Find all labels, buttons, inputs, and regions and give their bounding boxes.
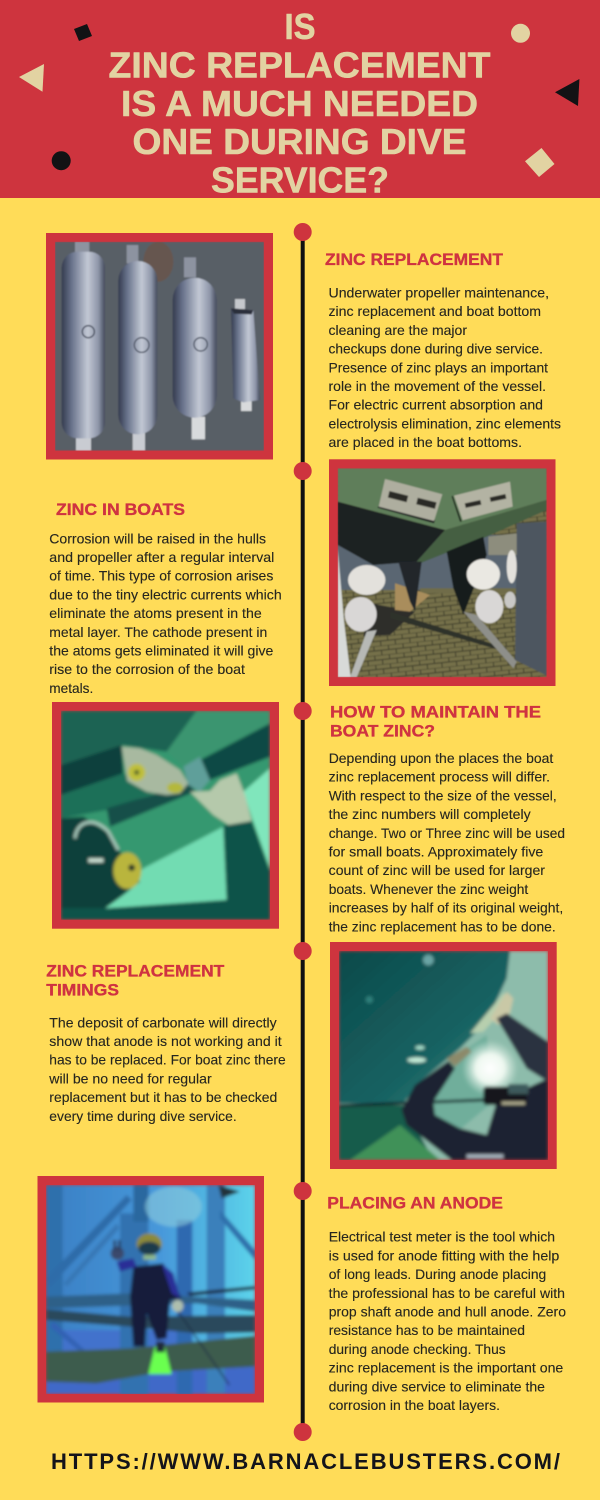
heading: zinc replacement timings: ZINC REPLACEMENT (46, 962, 225, 981)
text: placing an anode: corrosion in the boat layers. (329, 1397, 500, 1413)
text: zinc replacement: cleaning are the major (328, 322, 467, 338)
text: how to maintain the boat zinc: the zinc numbers will completely (329, 806, 531, 822)
header banner (0, 0, 600, 200)
photo: diver at offshore platform (38, 1176, 264, 1402)
text: zinc replacement: Underwater propeller maintenance, (328, 284, 549, 300)
text: placing an anode: prop shaft anode and hull anode. Zero (329, 1304, 566, 1320)
photo: zinc anodes (46, 233, 273, 460)
text: placing an anode: during anode checking. Thus (329, 1341, 506, 1357)
heading: zinc replacement: ZINC REPLACEMENT (325, 250, 504, 269)
text: zinc replacement: Presence of zinc plays an important (328, 359, 548, 375)
text: zinc replacement timings (48, 1014, 286, 1124)
icon: black square (74, 24, 92, 41)
text: zinc replacement timings: show that anode is not working and it (49, 1033, 282, 1049)
text: how to maintain the boat zinc (329, 750, 565, 934)
text: placing an anode: resistance has to be maintained (329, 1322, 525, 1338)
text: placing an anode: of long leads. During anode placing (329, 1266, 546, 1282)
text: how to maintain the boat zinc: the zinc replacement has to be done. (329, 918, 556, 934)
heading: how to maintain the boat zinc (330, 703, 541, 741)
text: placing an anode: zinc replacement is the important one (329, 1360, 564, 1376)
text: zinc replacement timings: replacement but it has to be checked (49, 1089, 277, 1105)
text: how to maintain the boat zinc: Depending upon the places the boat (329, 750, 553, 766)
text: how to maintain the boat zinc: increases by half of its original weight, (329, 900, 563, 916)
text: zinc replacement (328, 284, 561, 450)
text: placing an anode: during dive service to eliminate the (329, 1378, 545, 1394)
heading: how to maintain the boat zinc: HOW TO MAINTAIN THE (330, 703, 541, 722)
title: ZINC REPLACEMENT (108, 44, 491, 86)
photo: divers' hands underwater (52, 702, 279, 929)
text: how to maintain the boat zinc: count of zinc will be used for larger (329, 862, 545, 878)
text: zinc replacement timings: will be no need for regular (48, 1070, 212, 1086)
text: zinc replacement timings: The deposit of carbonate will directly (49, 1014, 277, 1030)
text: zinc in boats: metal layer. The cathode present in (49, 624, 267, 640)
text: zinc in boats: metals. (49, 680, 93, 696)
text: zinc in boats: rise to the corrosion of the boat (49, 661, 245, 677)
text: how to maintain the boat zinc: change. Two or Three zinc will be used (329, 825, 565, 841)
icon: black triangle (555, 79, 579, 106)
heading: zinc replacement timings: TIMINGS (46, 981, 119, 1000)
heading: placing an anode: PLACING AN ANODE (327, 1193, 503, 1212)
text: zinc replacement: role in the movement of the vessel. (328, 378, 546, 394)
heading: zinc in boats: ZINC IN BOATS (56, 500, 185, 519)
text: zinc replacement timings: has to be replaced. For boat zinc there (49, 1052, 286, 1068)
text: zinc in boats: and propeller after a regular interval (49, 549, 274, 565)
text: how to maintain the boat zinc: for small boats. Approximately five (329, 844, 544, 860)
photo: diver under hull (330, 942, 557, 1169)
text: zinc in boats: the atoms gets eliminated it will give (49, 642, 274, 658)
text: placing an anode: Electrical test meter is the tool which (329, 1229, 555, 1245)
timeline (294, 223, 312, 1441)
title: SERVICE? (211, 160, 389, 200)
title: IS A MUCH NEEDED (121, 83, 478, 124)
photo: boat hull with zinc plates (329, 459, 556, 686)
heading: zinc replacement timings (46, 962, 225, 1000)
text: placing an anode (329, 1229, 566, 1413)
title: ONE DURING DIVE (132, 121, 466, 162)
text: zinc in boats: eliminate the atoms present in the (49, 605, 262, 621)
title (108, 6, 491, 200)
icon: black circle (52, 151, 71, 170)
text: how to maintain the boat zinc: boats. Whenever the zinc weight (329, 881, 528, 897)
text: zinc replacement: are placed in the boat bottoms. (328, 434, 522, 450)
text: zinc in boats: due to the tiny electric currents which (49, 586, 282, 602)
text: zinc in boats: Corrosion will be raised in the hulls (49, 530, 266, 546)
icon: cream circle (511, 24, 530, 43)
icon: cream diamond (525, 148, 554, 177)
text: zinc in boats: of time. This type of corrosion arises (49, 568, 273, 584)
text: zinc replacement: zinc replacement and boat bottom (328, 303, 541, 319)
text: zinc replacement: electrolysis elimination, zinc elements (328, 415, 561, 431)
icon: cream triangle (19, 64, 44, 92)
text: zinc replacement timings: every time during dive service. (49, 1108, 237, 1124)
text: how to maintain the boat zinc: zinc replacement process will differ. (329, 769, 550, 785)
text: placing an anode: the professional has to be careful with (329, 1285, 565, 1301)
text: how to maintain the boat zinc: With respect to the size of the vessel, (329, 787, 557, 803)
title: IS (284, 6, 316, 47)
heading: how to maintain the boat zinc: BOAT ZINC? (330, 722, 435, 741)
text: zinc in boats (49, 530, 282, 696)
text: zinc replacement: For electric current absorption and (328, 397, 543, 413)
footer url: HTTPS://WWW.BARNACLEBUSTERS.COM/ (51, 1449, 560, 1474)
text: zinc replacement: checkups done during dive service. (328, 341, 543, 357)
text: placing an anode: is used for anode fitting with the help (329, 1247, 560, 1263)
